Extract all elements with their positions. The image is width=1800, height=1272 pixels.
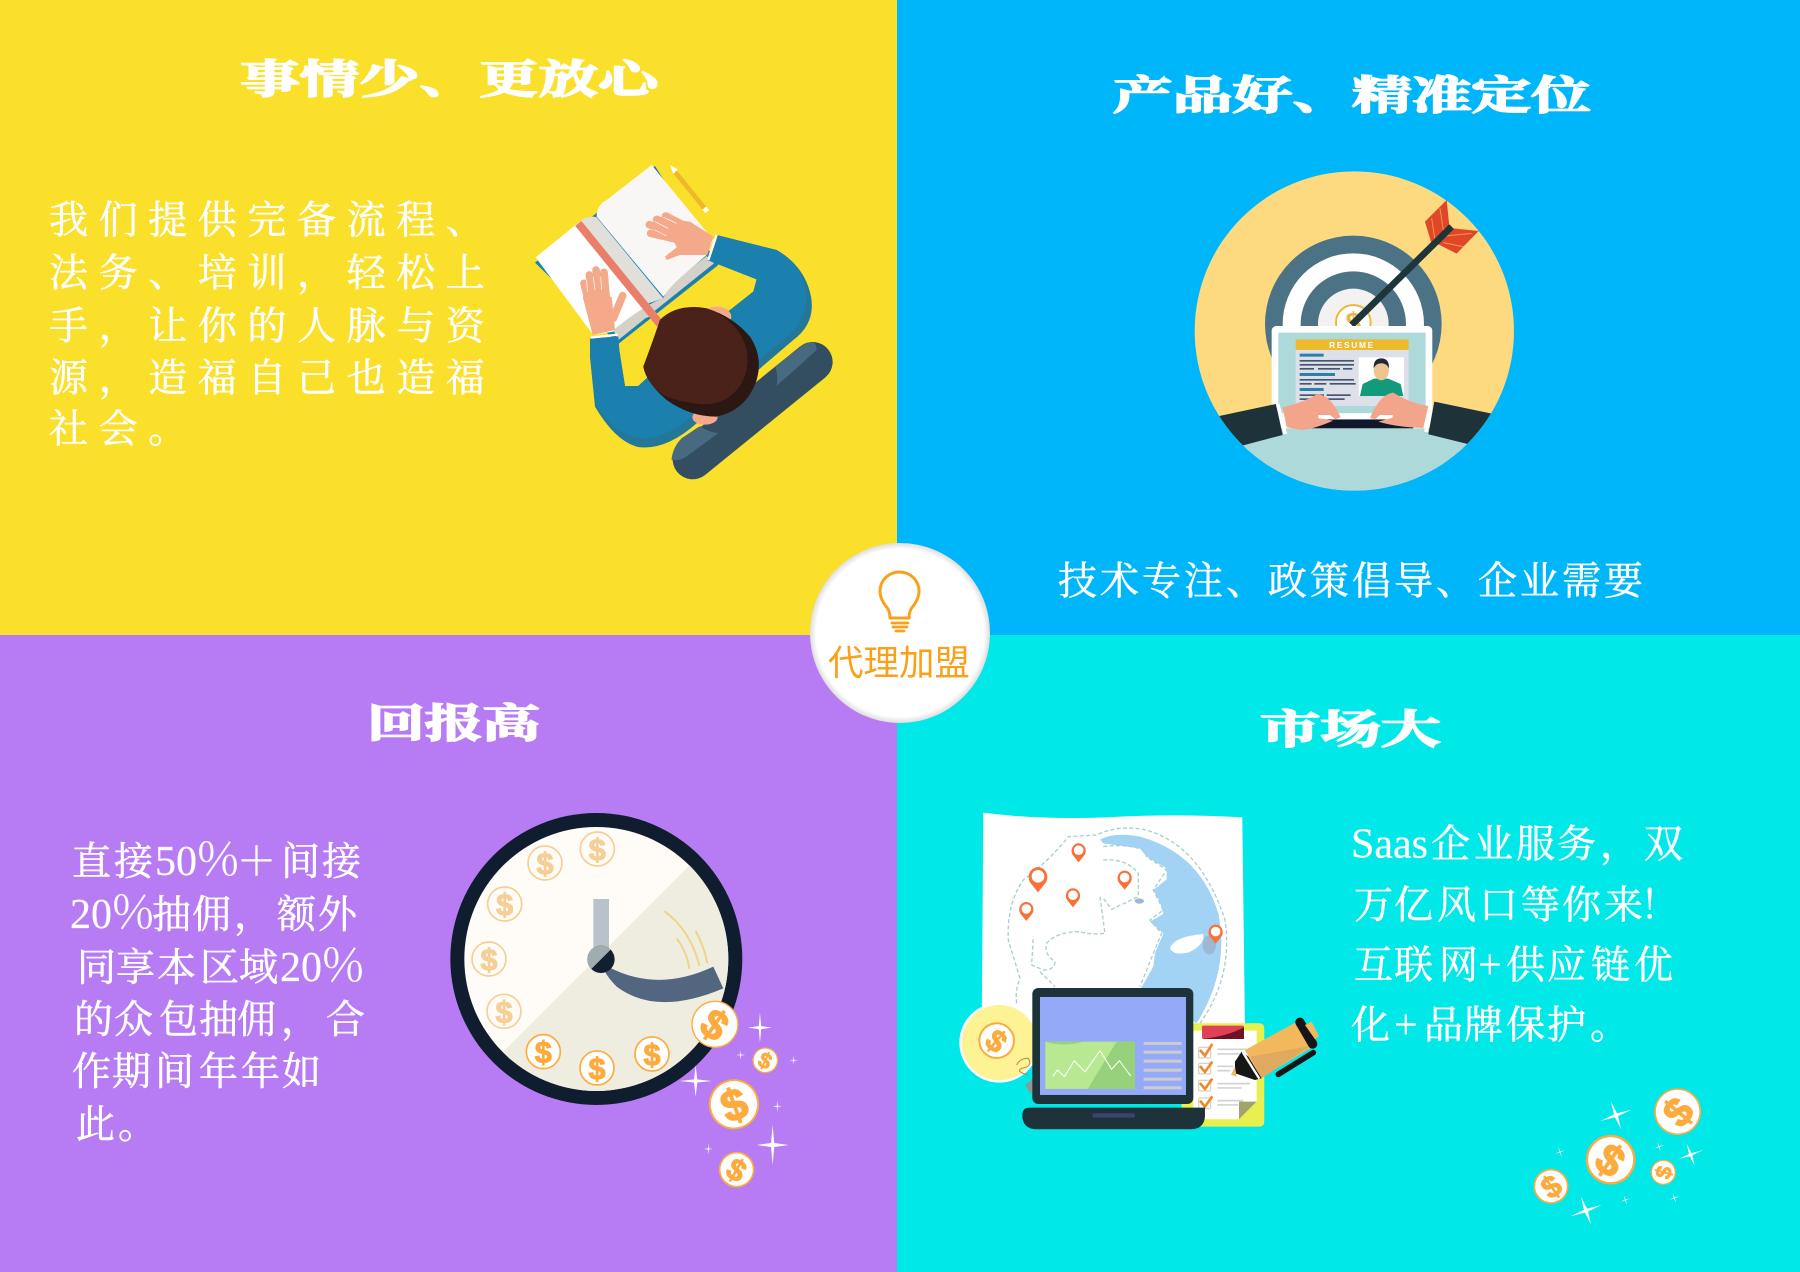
text block: purple panel body: 。	[118, 1104, 157, 1147]
text block: cyan panel body: 牌	[1464, 1004, 1503, 1048]
yellow disc	[1195, 171, 1514, 491]
falling coins: $	[754, 1047, 776, 1075]
faded clock coins: $	[495, 995, 513, 1029]
text block: cyan panel body: 。	[1590, 1004, 1629, 1048]
island	[1170, 934, 1203, 954]
motion lines	[665, 912, 707, 968]
left page	[536, 220, 657, 335]
text block: cyan panel body: 风	[1437, 884, 1476, 928]
text block: cyan panel body: 企	[1431, 824, 1470, 866]
text block: cyan panel body: +	[1478, 942, 1502, 988]
bright clock coins: $	[535, 1036, 552, 1070]
map paper	[982, 813, 1245, 1030]
text block: yellow panel body: 手，让你的人脉与资	[49, 306, 495, 348]
text block: purple panel body: 0	[301, 945, 322, 991]
text block: cyan panel body: 应	[1547, 944, 1586, 988]
left hand	[583, 270, 623, 335]
text block: purple panel body: ＋	[237, 841, 276, 884]
illustration: coins and sparkles in cyan panel: $	[1535, 1168, 1568, 1206]
text block: purple panel body: 接	[114, 841, 154, 884]
text block: purple panel body: 作	[72, 1051, 111, 1094]
faded clock coins: $	[536, 847, 554, 881]
text block: purple panel body: 额	[277, 894, 317, 937]
text block: purple panel body: 此	[76, 1104, 115, 1147]
centre badge: 代理加盟	[810, 543, 990, 723]
falling coins	[682, 992, 782, 1194]
text block: purple panel body: 众	[114, 999, 153, 1042]
laptop	[1022, 988, 1205, 1129]
text block: purple panel body: 佣	[237, 999, 276, 1042]
text block: yellow panel body	[49, 200, 495, 452]
text block: cyan panel body: 护	[1547, 1004, 1586, 1048]
text block: cyan panel body: Saas	[1351, 822, 1428, 868]
text block: cyan panel body: 口	[1479, 884, 1518, 928]
book cover	[535, 166, 718, 344]
text block: blue panel tagline: 技术专注、政策倡导、企业需要	[1058, 560, 1646, 604]
pencil	[670, 165, 707, 212]
panel: purple background	[0, 635, 897, 1272]
text block: cyan panel body: 链	[1591, 944, 1630, 988]
text block: cyan panel body: 联	[1394, 944, 1433, 988]
text block: cyan panel body: 来	[1604, 884, 1643, 928]
cuffs	[1278, 404, 1430, 434]
clock body	[450, 813, 742, 1105]
text block: cyan panel body: 保	[1506, 1004, 1545, 1048]
resume	[1296, 339, 1409, 406]
marker pen	[1231, 1021, 1319, 1080]
panel: blue background	[897, 0, 1800, 635]
illustration: coins and sparkles in cyan panel: $	[1586, 1134, 1633, 1188]
text block: cyan panel body: 万	[1354, 884, 1393, 928]
heading: 回报高: 回报高	[367, 701, 540, 746]
text block: purple panel body: 区	[200, 947, 239, 990]
heading: 产品好、精准定位: 产品好、精准定位	[1113, 73, 1591, 118]
text block: cyan panel body: 服	[1516, 824, 1555, 866]
illustration: coins and sparkles in cyan panel: $	[1650, 1163, 1677, 1182]
hair	[643, 307, 759, 417]
badge label: 代理加盟	[828, 643, 970, 683]
text block: purple panel body: ％	[320, 940, 366, 991]
illustration: coins and sparkles in cyan panel	[1528, 1080, 1710, 1230]
faded clock coins: $	[496, 888, 513, 922]
illustration: map, laptop, bulb, clipboard and pen	[959, 813, 1319, 1129]
text block: cyan panel body: ，	[1600, 824, 1639, 866]
sweeping hand	[605, 966, 723, 1002]
dashed coastline	[1008, 828, 1227, 1023]
heading: 市场大: 市场大	[1260, 707, 1441, 752]
text block: cyan panel body	[1351, 822, 1683, 1048]
tablet	[1272, 326, 1432, 428]
map pins	[1019, 843, 1223, 944]
shirt cuffs	[591, 235, 717, 338]
hands	[1283, 393, 1428, 430]
sparkles	[680, 1013, 798, 1165]
arrow	[1352, 200, 1479, 325]
text block: cyan panel body: 供	[1506, 944, 1546, 988]
text block: purple panel body: 间	[281, 841, 320, 884]
text block: cyan panel body: 互	[1354, 944, 1393, 988]
text block: yellow panel body: 社会。	[49, 408, 198, 452]
text block: purple panel body: 年	[241, 1051, 280, 1094]
text block: purple panel body: 本	[157, 947, 196, 990]
icon: lightbulb	[880, 572, 919, 631]
text block: yellow panel body: 法务、培训，轻松上	[49, 252, 495, 296]
text block: cyan panel body: ！	[1640, 884, 1679, 928]
text block: purple panel body: 抽	[152, 894, 191, 937]
target: $	[1345, 308, 1361, 340]
jacket sleeves	[1213, 402, 1498, 447]
falling coins: $	[692, 1000, 737, 1050]
text block: purple panel body: 佣	[192, 894, 231, 937]
text block: purple panel body: 的	[74, 999, 113, 1042]
bright clock coins: $	[588, 1052, 606, 1086]
tablet screen	[1278, 333, 1426, 413]
text block: purple panel body: 享	[116, 947, 155, 990]
text block: purple panel body: 外	[318, 894, 358, 937]
bright clock coins	[526, 1035, 669, 1086]
text block: purple panel body: 合	[326, 999, 365, 1042]
text block: purple panel body: 2	[280, 945, 301, 991]
panel: cyan background	[897, 635, 1800, 1272]
text block: purple panel body: ％	[195, 834, 241, 885]
text block: purple panel body: 同	[77, 947, 116, 990]
text block: cyan panel body: 优	[1634, 944, 1673, 988]
text block: purple panel body: 期	[112, 1051, 151, 1094]
text block: purple panel body: ，	[234, 894, 273, 937]
sweater	[590, 235, 812, 448]
text block: purple panel body: 年	[199, 1051, 238, 1094]
clock hub	[587, 946, 615, 973]
book gutter	[582, 217, 663, 303]
text block: purple panel body: ，	[281, 999, 320, 1042]
text block: yellow panel body: 源，造福自己也造福	[49, 358, 495, 400]
text block: cyan panel body: 品	[1424, 1004, 1463, 1048]
text block: purple panel body: 抽	[199, 999, 238, 1042]
text block: purple panel body	[70, 834, 366, 1147]
illustration: coins and sparkles in cyan panel: $	[1653, 1088, 1703, 1136]
right page	[597, 165, 713, 297]
text block: cyan panel body: 化	[1351, 1004, 1390, 1048]
clock shaded half	[502, 866, 728, 1091]
clipboard	[1182, 1023, 1264, 1127]
faded clock coins	[472, 832, 614, 1029]
text block: purple panel body: 0	[176, 839, 197, 885]
text block: cyan panel body: 双	[1644, 824, 1683, 866]
right hand	[649, 216, 713, 260]
target	[1265, 236, 1442, 412]
text block: purple panel body: 0	[91, 892, 112, 938]
text block: purple panel body: 接	[322, 841, 362, 884]
text block: cyan panel body: +	[1394, 1002, 1418, 1048]
illustration: dollar clock with falling coins	[450, 813, 798, 1194]
text block: cyan panel body: 等	[1521, 884, 1560, 928]
text block: cyan panel body: 务	[1557, 824, 1596, 866]
lightbulb with coin: $	[979, 1023, 1013, 1060]
ears	[692, 307, 731, 425]
text block: cyan panel body: 网	[1439, 944, 1478, 988]
text block: cyan panel body: 业	[1474, 824, 1513, 866]
text block: cyan panel body: 你	[1562, 884, 1602, 928]
panel: yellow background	[0, 0, 897, 635]
text block: purple panel body: 如	[282, 1051, 321, 1094]
lightbulb with coin	[959, 1003, 1039, 1093]
text block: purple panel body: 间	[155, 1051, 194, 1094]
text block: purple panel body: ％	[110, 887, 156, 938]
resume: RESUME	[1329, 340, 1375, 350]
globe water	[1100, 835, 1221, 1023]
text block: purple panel body: 直	[72, 841, 111, 884]
text block: purple panel body: 2	[70, 892, 91, 938]
red ribbon	[578, 223, 660, 324]
text block: purple panel body: 域	[239, 947, 278, 990]
text block: cyan panel body: 亿	[1394, 884, 1433, 928]
minute hand	[593, 899, 609, 951]
illustration: person reading a book from above	[535, 165, 817, 460]
heading: 事情少、更放心: 事情少、更放心	[240, 57, 665, 102]
falling coins: $	[714, 1078, 755, 1133]
table	[1228, 428, 1480, 491]
sparkles	[1554, 1096, 1707, 1230]
chair	[672, 342, 817, 460]
bright clock coins: $	[643, 1038, 661, 1072]
text block: purple panel body: 5	[155, 839, 176, 885]
tablet stand	[1303, 419, 1413, 428]
faded clock coins: $	[589, 833, 606, 867]
text block: purple panel body: 包	[159, 999, 198, 1042]
falling coins: $	[720, 1152, 752, 1189]
faded clock coins: $	[480, 943, 498, 977]
text block: yellow panel body: 我们提供完备流程、	[49, 200, 495, 242]
illustration: target and resume tablet	[1187, 171, 1520, 495]
